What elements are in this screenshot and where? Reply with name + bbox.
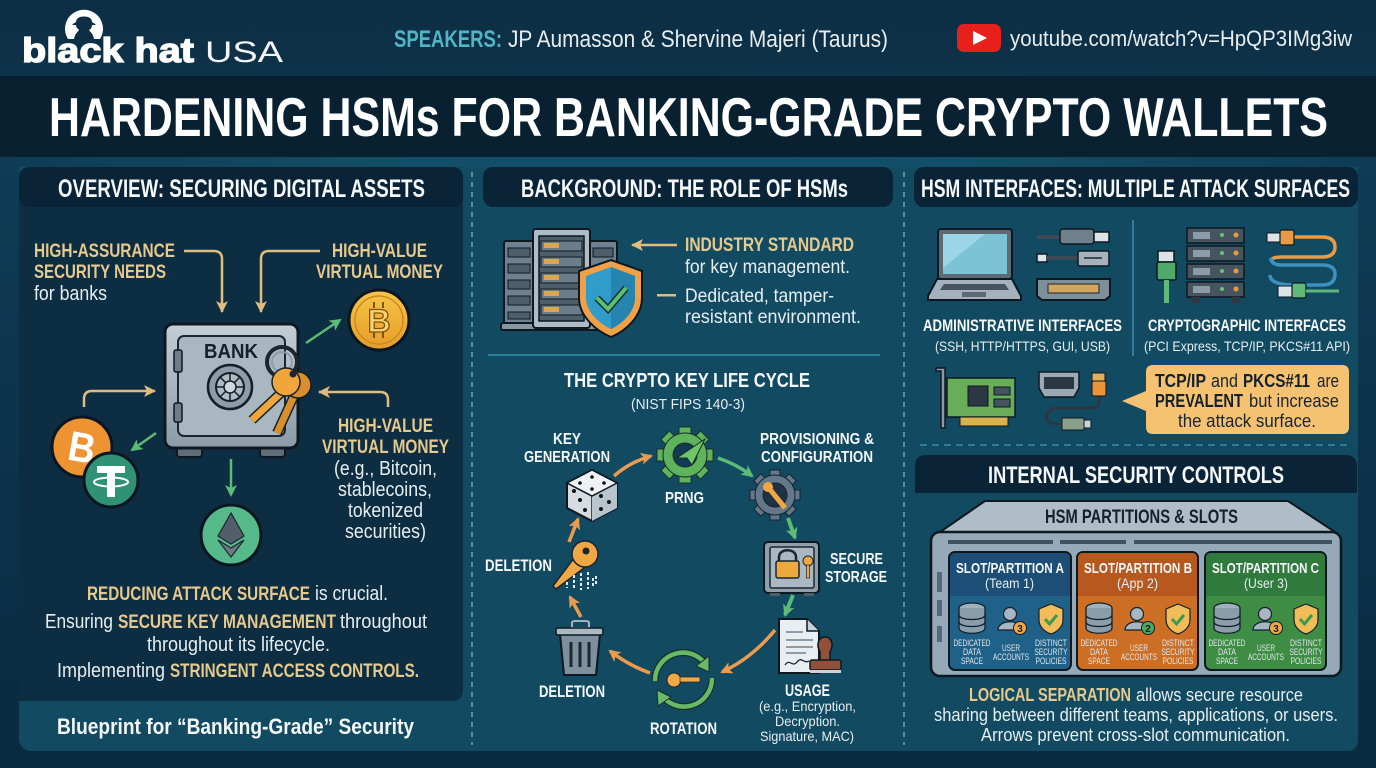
panel: overview	[19, 167, 463, 739]
life cycle heading	[564, 370, 810, 413]
step label: key generation: KEY	[553, 431, 581, 448]
arrow: safe to stablecoins	[132, 433, 156, 450]
slot C: SLOT/PARTITION C	[1212, 560, 1319, 577]
label: prng: PRNG	[665, 490, 704, 507]
arrow: trash to key	[570, 597, 581, 617]
arrow: virtual money to safe	[261, 251, 320, 312]
label: high-value virtual money detail: VIRTUAL MONEY	[322, 436, 449, 458]
slot C: SPACE	[1216, 656, 1238, 667]
callout: prevalent protocols: are	[1317, 371, 1339, 391]
background heading: BACKGROUND: THE ROLE OF HSMs	[521, 175, 848, 203]
text block: logical separation: LOGICAL SEPARATION	[969, 684, 1131, 705]
text: industry standard: for key management.	[685, 256, 850, 278]
icon: pci card	[936, 368, 1015, 428]
callout: prevalent protocols: but increase	[1249, 391, 1339, 411]
slot B: SECURITY	[1162, 647, 1195, 658]
slot C	[1205, 552, 1326, 670]
slot C: ACCOUNTS	[1248, 652, 1284, 663]
slot B: USER	[1130, 643, 1148, 654]
icon: orange bitcoin coin: B	[65, 422, 99, 473]
step label: secure storage: SECURE	[830, 551, 883, 568]
slot A: 3	[1017, 624, 1023, 635]
label: administrative interfaces: (SSH, HTTP/HTTPS, GUI, USB)	[935, 338, 1110, 354]
arrow: rotation to deletion	[610, 651, 650, 673]
speakers line: SPEAKERS:	[394, 26, 502, 53]
arrow: safe to coin	[306, 320, 340, 343]
slot A: DATA	[963, 647, 981, 658]
slot B: ACCOUNTS	[1121, 652, 1157, 663]
slot B: DATA	[1090, 647, 1108, 658]
arrow: storage to usage	[785, 595, 793, 615]
logo: black hat USA: USA	[205, 36, 283, 69]
speakers line	[394, 26, 888, 53]
icon: server racks with shield	[501, 229, 642, 337]
label: high-value virtual money detail: stablecoins,	[338, 479, 432, 501]
arrow: needs to safe	[184, 251, 222, 312]
icon: gold bitcoin coin	[349, 290, 409, 350]
arrow: usage to rotation	[722, 630, 775, 672]
label: high-value virtual money detail: securities)	[345, 521, 426, 543]
slot A: SLOT/PARTITION A	[956, 560, 1064, 577]
icon: green gear prng	[657, 427, 713, 483]
icon: bank safe with keys	[165, 324, 311, 457]
label: high-value virtual money detail: tokenized	[348, 500, 423, 522]
youtube link: youtube.com/watch?v=HpQP3IMg3iw	[1010, 26, 1352, 51]
label: administrative interfaces: ADMINISTRATIVE INTERFACES	[923, 317, 1122, 335]
slot A: DISTINCT	[1035, 638, 1067, 649]
step label: provisioning: CONFIGURATION	[761, 449, 873, 466]
arrow: to industry standard	[632, 244, 677, 246]
icon: secure storage safe	[764, 542, 819, 596]
HSM device body	[931, 532, 1341, 676]
slot C: DEDICATED	[1208, 638, 1246, 649]
slot A: (Team 1)	[985, 576, 1034, 591]
panel: HSM interfaces	[914, 167, 1358, 751]
step label: key generation	[524, 431, 610, 466]
icon: grey gear with wrench	[750, 470, 800, 520]
slot B: DISTINCT	[1162, 638, 1194, 649]
text block: overview key points: throughout	[340, 611, 427, 633]
slot B: (App 2)	[1117, 576, 1158, 591]
slot C: POLICIES	[1290, 656, 1322, 667]
slot A: POLICIES	[1036, 656, 1066, 667]
slot C: USER	[1257, 643, 1275, 654]
arrow: safe to ethereum	[230, 459, 232, 495]
label: high-value virtual money detail: HIGH-VALUE	[338, 415, 433, 437]
text block: logical separation: sharing between different teams, applications, or users.	[934, 705, 1338, 725]
step label: key generation: GENERATION	[524, 449, 610, 466]
icon: ethernet cable	[1267, 230, 1339, 298]
arrow: generation to prng	[614, 456, 651, 476]
slot A: DEDICATED	[954, 638, 991, 649]
slot B: 2	[1145, 624, 1151, 635]
logo: black hat USA: black hat	[22, 32, 194, 70]
slot A	[949, 552, 1071, 670]
slot B: SLOT/PARTITION B	[1084, 560, 1192, 577]
arrow: prng to provisioning	[718, 458, 752, 476]
icon: laptop	[928, 229, 1021, 300]
text: industry standard	[685, 234, 854, 278]
icon: trash can	[556, 621, 603, 675]
label: high-assurance security needs: SECURITY NEEDS	[34, 261, 166, 283]
internal security controls heading	[915, 455, 1357, 493]
interfaces heading	[914, 167, 1358, 207]
icon: tether coin	[84, 453, 138, 507]
text: tamper-resistant: Dedicated, tamper-	[685, 285, 834, 307]
label: high-value virtual money top	[316, 240, 443, 283]
label: high-value virtual money top: VIRTUAL MONEY	[316, 261, 443, 283]
label: high-value virtual money top: HIGH-VALUE	[332, 240, 427, 262]
slot C: SECURITY	[1290, 647, 1323, 658]
text block: overview key points: SECURE KEY MANAGEMENT	[118, 611, 336, 633]
step label: usage: (e.g., Encryption,	[759, 698, 856, 714]
step label: usage: Signature, MAC)	[760, 728, 854, 744]
step label: provisioning	[760, 431, 874, 466]
slot B: POLICIES	[1162, 656, 1194, 667]
callout: prevalent protocols: PKCS#11	[1243, 371, 1310, 391]
callout: prevalent protocols: the attack surface.	[1178, 411, 1316, 431]
slot C: (User 3)	[1244, 576, 1288, 591]
page background	[0, 157, 1376, 768]
content band	[0, 157, 1376, 751]
label: high-value virtual money detail	[322, 415, 449, 543]
label: deletion bottom: DELETION	[539, 682, 605, 701]
dash marker	[657, 294, 676, 296]
panel: background	[483, 167, 893, 751]
text block: logical separation	[934, 684, 1338, 745]
text block: logical separation: allows secure resource	[1136, 685, 1303, 705]
label: high-value virtual money detail: (e.g., Bitcoin,	[334, 458, 437, 480]
arrow: bitcoin to safe	[84, 391, 155, 407]
icon: orange bitcoin coin	[52, 417, 112, 477]
callout: prevalent protocols: and	[1211, 371, 1238, 391]
text block: overview key points	[45, 583, 427, 682]
icon: rotation key	[655, 653, 712, 707]
arrow: money label to safe	[319, 392, 388, 407]
slot A: USER	[1002, 643, 1020, 654]
icon: rj45 port and cable	[1039, 372, 1106, 430]
callout: prevalent protocols: TCP/IP	[1155, 371, 1206, 391]
text: tamper-resistant: resistant environment.	[685, 306, 861, 328]
label: cryptographic interfaces: (PCI Express, TCP/IP, PKCS#11 API)	[1144, 338, 1350, 354]
HSM device top: HSM PARTITIONS & SLOTS	[1045, 507, 1238, 528]
label: rotation: ROTATION	[650, 719, 717, 738]
text block: overview key points: REDUCING ATTACK SURFACE	[87, 583, 310, 605]
slot C: 3	[1273, 624, 1279, 635]
background heading	[483, 167, 893, 207]
icon: dice	[567, 470, 617, 521]
step label: secure storage	[825, 551, 887, 586]
slot A: SPACE	[961, 656, 983, 667]
step label: usage	[759, 681, 856, 744]
overview heading: OVERVIEW: SECURING DIGITAL ASSETS	[58, 175, 425, 203]
internal security controls heading: INTERNAL SECURITY CONTROLS	[988, 462, 1284, 489]
slot A: ACCOUNTS	[993, 652, 1029, 663]
life cycle heading: (NIST FIPS 140-3)	[631, 396, 745, 413]
slot C: DATA	[1218, 647, 1236, 658]
icon: rack stack	[1187, 228, 1244, 303]
icon: dissolving key	[553, 541, 598, 590]
label: high-assurance security needs: HIGH-ASSURANCE	[34, 240, 175, 262]
icon: ethereum coin	[201, 505, 261, 565]
label: deletion left: DELETION	[485, 556, 552, 575]
text block: overview key points: throughout its lifecycle.	[147, 634, 330, 656]
text block: overview key points: is crucial.	[315, 583, 388, 605]
icon: gold bitcoin coin: B	[367, 303, 391, 339]
arrow: provisioning to storage	[788, 518, 795, 538]
label: administrative interfaces	[923, 317, 1122, 354]
arrow: key to dice	[569, 519, 578, 542]
icon: green usb plug	[1157, 251, 1176, 303]
footer: blueprint: Blueprint for “Banking-Grade” Security	[57, 714, 415, 739]
callout: prevalent protocols: PREVALENT	[1155, 391, 1243, 411]
text: tamper-resistant	[685, 285, 861, 328]
label: high-assurance security needs	[34, 240, 175, 305]
icon: usb cables and hdmi port	[1037, 229, 1110, 300]
slot B: DEDICATED	[1080, 638, 1118, 649]
icon: bank safe with keys: BANK	[204, 341, 259, 363]
logo: black hat USA	[22, 10, 283, 70]
speakers line: JP Aumasson & Shervine Majeri (Taurus)	[508, 26, 888, 53]
step label: usage: Decryption.	[775, 713, 840, 729]
icon: document with stamp	[779, 619, 841, 673]
step label: usage: USAGE	[785, 681, 830, 700]
slot A: SECURITY	[1034, 647, 1068, 658]
label: cryptographic interfaces	[1144, 317, 1350, 354]
slot C: DISTINCT	[1290, 638, 1322, 649]
slot B: SPACE	[1088, 656, 1110, 667]
step label: provisioning: PROVISIONING &	[760, 431, 874, 448]
label: high-assurance security needs: for banks	[34, 283, 107, 305]
slot B	[1077, 552, 1198, 670]
text block: overview key points: Ensuring	[45, 611, 113, 633]
text block: overview key points: STRINGENT ACCESS CONTROLS.	[170, 660, 419, 682]
text: industry standard: INDUSTRY STANDARD	[685, 234, 854, 256]
overview heading	[19, 167, 463, 207]
life cycle heading: THE CRYPTO KEY LIFE CYCLE	[564, 370, 810, 392]
text block: overview key points: Implementing	[57, 660, 165, 682]
text block: logical separation: Arrows prevent cross-slot communication.	[981, 725, 1290, 745]
step label: secure storage: STORAGE	[825, 569, 887, 586]
callout: prevalent protocols	[1122, 365, 1349, 434]
HSM device top	[940, 501, 1335, 532]
